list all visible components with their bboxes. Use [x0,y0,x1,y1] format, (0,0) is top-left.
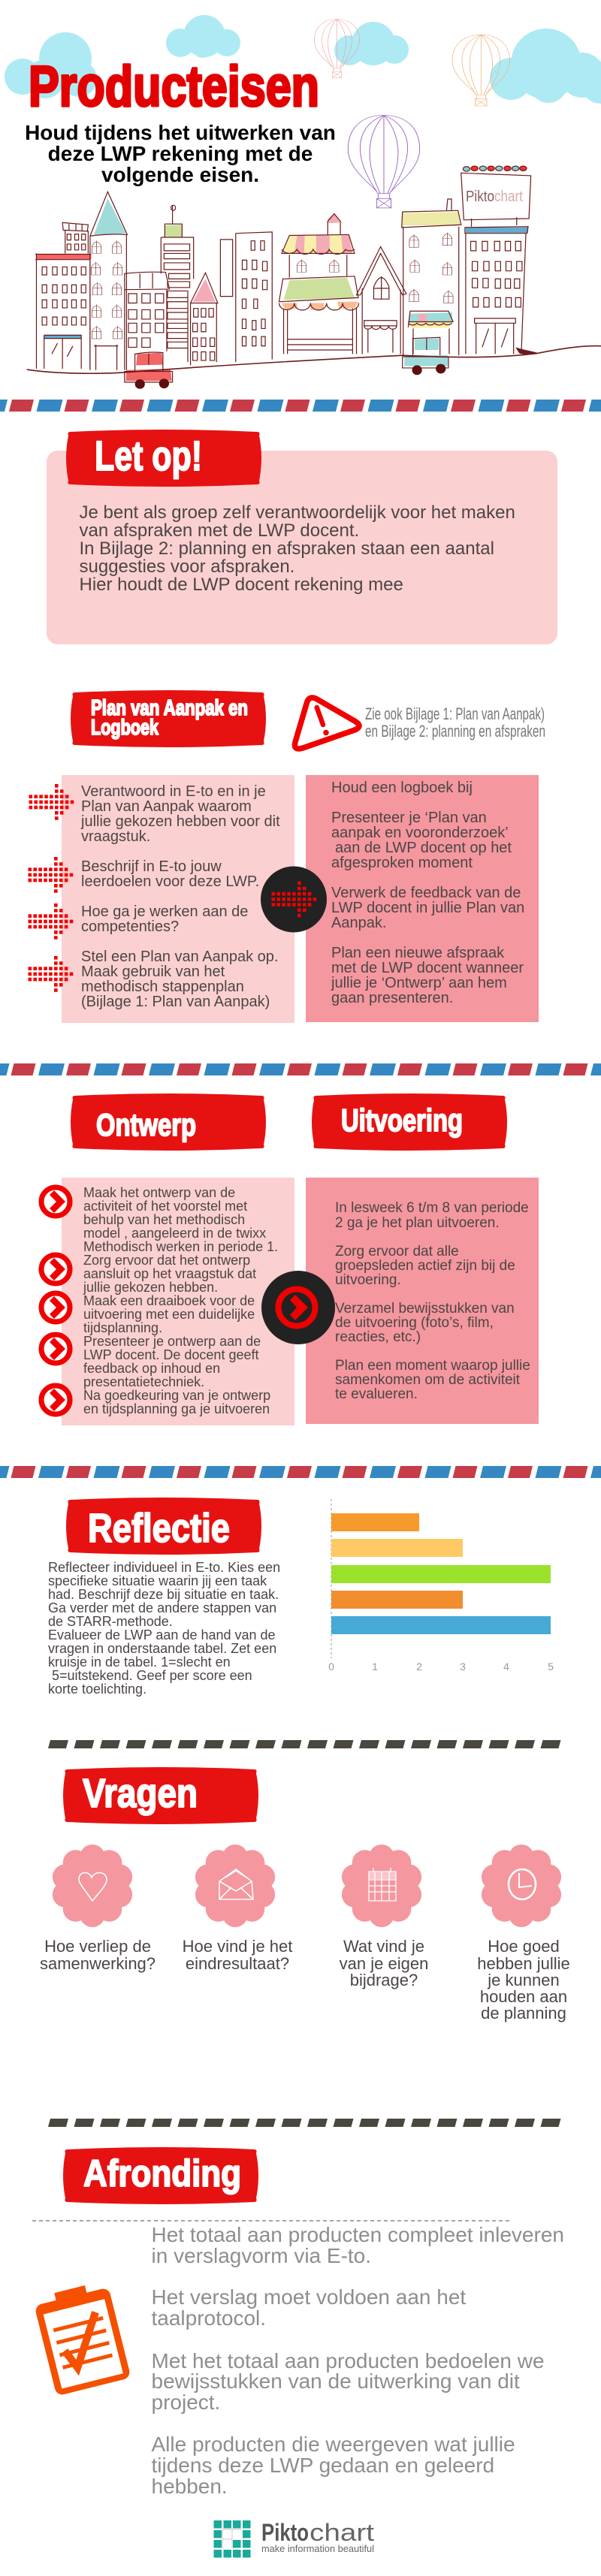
text: logboek list: met de LWP docent wanneer [331,960,524,976]
text: ontwerp list: Methodisch werken in periode 1. [83,1239,278,1254]
text: afronding body: in verslagvorm via E-to. [152,2244,371,2267]
text: aanpak list: competenties? [81,918,179,935]
text: afronding body: hebben. [152,2475,228,2498]
text: logboek list: aanpak en vooronderzoek’ [331,825,509,841]
text: uitvoering list: de uitvoering (foto’s, film, [335,1315,494,1331]
text: afronding body: project. [152,2390,220,2414]
text: logboek list: gaan presenteren. [331,990,453,1006]
axis labels: 0 [328,1661,334,1673]
text: ontwerp list: model , aangeleerd in de twixx [83,1226,266,1241]
text: logboek list [331,780,524,1006]
logo wordmark: Pikto [261,2519,309,2546]
question captions: Hoe goed [488,1937,560,1956]
text: afronding body: taalprotocol. [152,2306,266,2330]
text: ontwerp list: feedback op inhoud en [83,1361,220,1376]
banner: ontwerp: Ontwerp [96,1107,196,1142]
text: reflectie body: kruisje in de tabel. 1=slecht en [48,1654,231,1670]
building outlines [35,253,91,369]
text: uitvoering list: samenkomen om de activiteit [335,1372,521,1388]
text: logboek list: LWP docent in jullie Plan van [331,900,524,916]
question captions: bijdrage? [350,1971,418,1989]
text: logboek list: afgesproken moment [331,855,473,871]
question captions: houden aan [480,1987,567,2006]
text: afronding body: Alle producten die weergeven wat jullie [152,2433,515,2456]
billboard label: Piktochart [466,189,523,205]
icon: warning triangle [294,698,359,749]
text: ontwerp list [83,1185,278,1416]
banner: afronding [63,2147,258,2204]
banner: uitvoering: Uitvoering [341,1102,463,1138]
text: uitvoering list: te evalueren. [335,1386,418,1402]
divider dashes 1 [48,1740,561,1748]
text: reflectie body: had. Beschrijf deze bij situatie en taak. [48,1587,279,1602]
illustration: city skyline [27,166,601,389]
text: ontwerp list: uitvoering met een duidelijke [83,1307,255,1322]
divider stripe 3 [0,1466,601,1478]
axis labels: 4 [503,1661,509,1673]
text: reflectie body: vragen in onderstaande tabel. Zet een [48,1641,276,1656]
text: ontwerp list: Maak een draaiboek voor de [83,1293,255,1308]
axis labels: 1 [372,1661,378,1673]
text: let op body: Je bent als groep zelf verantwoordelijk voor het maken [80,502,515,523]
icon: center chevron disc [261,1271,335,1344]
text: logboek list: jullie je ‘Ontwerp’ aan hem [331,975,507,991]
banner: plan van aanpak: Logboek [91,716,159,740]
subtitle: deze LWP rekening met de [48,142,313,165]
text: afronding body: Met het totaal aan producten bedoelen we [152,2349,545,2372]
text: afronding body: tijdens deze LWP gedaan en geleerd [152,2454,494,2477]
text: logboek list: Plan een nieuwe afspraak [331,945,505,961]
text: afronding body: Het verslag moet voldoen aan het [152,2285,466,2309]
banner: let op [66,430,261,487]
text: let op body: Hier houdt de LWP docent rekening mee [80,575,403,595]
subtitle [25,121,336,186]
text: logboek list: Presenteer je ‘Plan van [331,810,487,826]
text: uitvoering list [335,1200,530,1402]
banner: plan van aanpak: Plan van Aanpak en [91,696,248,720]
text: reflectie body: Evalueer de LWP aan de hand van de [48,1627,276,1642]
text: uitvoering list: Zorg ervoor dat alle [335,1244,459,1259]
subtitle: volgende eisen. [101,163,259,186]
question captions: Hoe verliep de [44,1937,151,1956]
footer logo: make information beautiful [261,2544,374,2554]
banner: reflectie [66,1498,261,1555]
dashed rule [32,2220,510,2222]
text: uitvoering list: 2 ga je het plan uitvoeren. [335,1215,500,1231]
text: aanpak list: jullie gekozen hebben voor dit [80,813,280,830]
text: let op body: suggesties voor afspraken. [80,557,294,577]
cars [125,337,448,382]
text: aanpak list [80,783,280,1010]
panel: uitvoering [306,1178,539,1424]
text: ontwerp list: behulp van het methodisch [83,1212,245,1227]
banner: let op: Let op! [95,432,202,479]
question captions: Wat vind je [343,1937,424,1956]
question captions: samenwerking? [40,1954,156,1973]
text: reflectie body [48,1560,280,1697]
text: aanpak list: vraagstuk. [81,828,150,845]
banner: plan van aanpak [71,690,266,747]
panel: ontwerp [62,1178,294,1425]
icon: clipboard [32,2280,131,2396]
text: uitvoering list: Plan een moment waarop jullie [335,1358,530,1374]
text: let op body [80,502,515,595]
divider dashes 2 [48,2119,561,2127]
question captions: eindresultaat? [186,1954,289,1973]
text: reflectie body: Reflecteer individueel in E-to. Kies een [48,1560,280,1575]
axis labels: 2 [416,1661,422,1673]
text: ontwerp list: tijdsplanning. [83,1320,162,1335]
text: afronding body: bewijsstukken van de uitwerking van dit [152,2369,520,2393]
banner: reflectie: Reflectie [88,1506,230,1551]
panel: logboek right [306,775,539,1022]
banner: vragen [63,1767,258,1824]
text: aanpak list: Beschrijf in E-to jouw [81,858,222,875]
icon: calendar [342,1845,421,1927]
text: reflectie body: de STARR-methode. [48,1614,173,1629]
text: logboek list: aan de LWP docent op het [335,840,512,856]
text: reflectie body: korte toelichting. [48,1682,146,1697]
text: afronding body [152,2223,564,2498]
icon: hot air balloons [314,20,510,208]
text: reflectie body: Ga verder met de andere stappen van [48,1600,276,1615]
axis labels: 5 [548,1661,554,1673]
text: logboek list: Aanpak. [331,915,386,931]
axis labels: 3 [460,1661,466,1673]
text: let op body: van afspraken met de LWP docent. [80,520,359,541]
text: ontwerp list: presentatietechniek. [83,1374,204,1389]
text: ontwerp list: jullie gekozen hebben. [83,1280,218,1295]
text: ontwerp list: Zorg ervoor dat het ontwerp [83,1253,250,1268]
subtitle: Houd tijdens het uitwerken van [25,121,336,144]
text: ontwerp list: aansluit op het vraagstuk dat [83,1266,256,1281]
text: aanpak list: Stel een Plan van Aanpak op. [81,949,278,965]
icon: clock [482,1845,561,1927]
divider stripe 2 [0,1063,601,1075]
text: aanpak list: methodisch stappenplan [81,979,244,995]
text: ontwerp list: Na goedkeuring van je ontwerp [83,1388,270,1403]
text: uitvoering list: Verzamel bewijsstukken van [335,1301,515,1317]
text: reflectie body: specifieke situatie waarin jij een taak [48,1573,267,1588]
text: afronding body: Het totaal aan producten compleet inleveren [152,2223,564,2246]
billboard lights [463,166,527,171]
text: ontwerp list: Maak het ontwerp van de [83,1185,235,1200]
bar chart [328,1499,554,1673]
text: uitvoering list: groepsleden actief zijn bij de [335,1258,515,1274]
text: aanpak list: Plan van Aanpak waarom [81,798,252,815]
footer logo [213,2519,374,2558]
banner: afronding: Afronding [83,2152,241,2194]
icon: pixel arrows [29,784,74,992]
question captions: je kunnen [487,1971,560,1989]
logo mark [213,2520,251,2558]
text: aanpak list: Maak gebruik van het [81,964,225,980]
banner: uitvoering [312,1093,507,1151]
text: ontwerp list: activiteit of het voorstel met [83,1199,247,1214]
footer logo: chart [310,2519,374,2546]
text: aanpak list: leerdoelen voor deze LWP. [81,873,259,890]
text: ontwerp list: en tijdsplanning ga je uitvoeren [83,1401,270,1416]
callout: see also [365,704,545,741]
text: aanpak list: Verantwoord in E-to en in je [81,783,266,800]
question captions: van je eigen [340,1954,428,1973]
text: uitvoering list: uitvoering. [335,1272,401,1288]
text: aanpak list: Hoe ga je werken aan de [81,903,248,920]
banner: vragen: Vragen [83,1771,198,1816]
text: let op body: In Bijlage 2: planning en afspraken staan een aantal [80,538,494,559]
text: reflectie body: 5=uitstekend. Geef per score een [52,1668,252,1683]
axis labels [328,1661,554,1673]
text: logboek list: Verwerk de feedback van de [331,885,521,901]
icon: center arrow disc [261,867,327,933]
text: ontwerp list: LWP docent. De docent geeft [83,1347,258,1362]
text: ontwerp list: Presenteer je ontwerp aan de [83,1334,261,1349]
scribble colour fills [36,198,528,381]
text: aanpak list: (Bijlage 1: Plan van Aanpak) [81,994,270,1010]
ground line [27,346,601,373]
text: uitvoering list: In lesweek 6 t/m 8 van periode [335,1200,529,1216]
divider stripe 1 [0,400,601,412]
icon: heart [53,1845,132,1927]
question captions [40,1937,570,2022]
icon: envelope [195,1845,275,1927]
question captions: Hoe vind je het [183,1937,292,1956]
header background clouds [5,15,601,104]
text: logboek list: Houd een logboek bij [331,780,473,796]
question captions: de planning [481,2004,566,2022]
icon: chevron bullets [41,1187,70,1414]
question captions: hebben jullie [477,1954,570,1973]
text: uitvoering list: reacties, etc.) [335,1329,421,1345]
panel: plan van aanpak left [62,775,294,1023]
banner: ontwerp [71,1093,266,1151]
title: Producteisen [29,55,319,119]
panel: let op [47,430,557,644]
